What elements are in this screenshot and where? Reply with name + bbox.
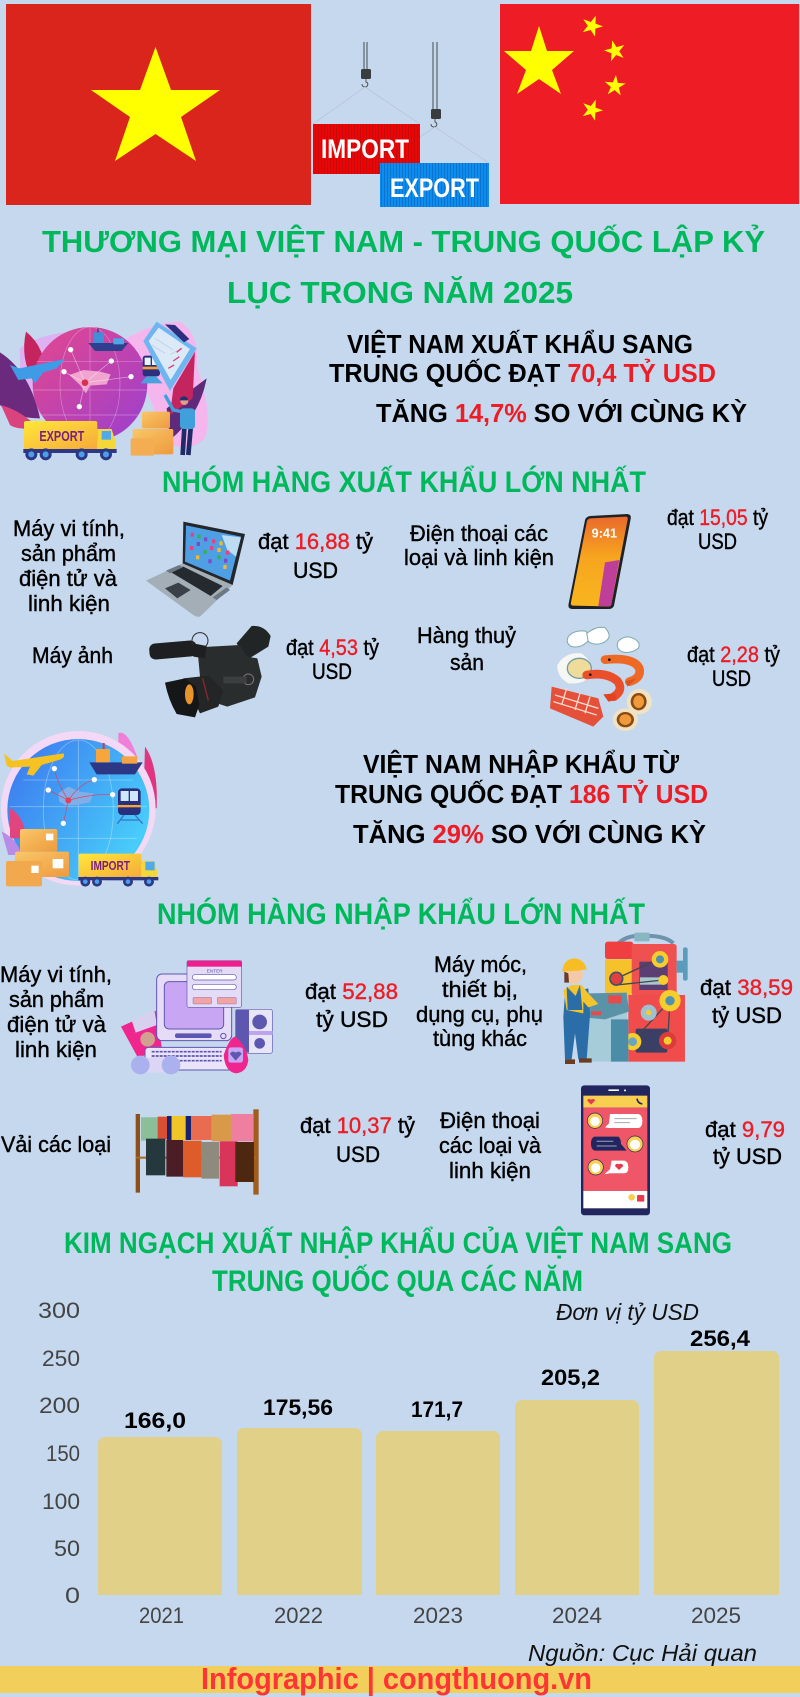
icon: smartphone (568, 514, 631, 609)
import item: fabrics (1, 1113, 416, 1167)
icon: retro computer (121, 961, 272, 1074)
icon: crane with import and export containers: IMPORT (321, 134, 409, 164)
flag: China (500, 4, 799, 204)
icon: chat smartphone (581, 1085, 650, 1215)
export item: seafood: Hàng thuỷ (417, 623, 517, 648)
chart x axis: 2024 (552, 1603, 602, 1628)
icon: laptop (146, 522, 245, 617)
chart bars (98, 1351, 779, 1595)
chart bar values (124, 1326, 751, 1433)
export item: computers: USD (293, 558, 338, 583)
heading: chart: TRUNG QUỐC QUA CÁC NĂM (212, 1264, 583, 1298)
export item: computers: đạt 16,88 tỷ (258, 529, 374, 554)
export item: phones (404, 505, 769, 570)
export item: computers: linh kiện (28, 591, 110, 616)
import summary text: TRUNG QUỐC ĐẠT 186 TỶ USD (335, 779, 708, 809)
import item: computers: điện tử và (7, 1012, 106, 1037)
import item: computers (0, 962, 398, 1062)
import item: machinery: tỷ USD (712, 1003, 782, 1028)
heading: chart (64, 1226, 732, 1298)
chart bar values: 205,2 (541, 1365, 600, 1390)
icon: fabric rack (136, 1109, 259, 1195)
icon: import globe illustration (1, 731, 158, 887)
icon: retro computer: ENTER (207, 969, 223, 974)
export summary text (329, 329, 747, 428)
export summary text: VIỆT NAM XUẤT KHẨU SANG (347, 329, 693, 359)
chart y axis: 100 (42, 1489, 80, 1514)
import item: machinery: đạt 38,59 (700, 975, 793, 1000)
chart x axis: 2023 (413, 1603, 463, 1628)
import item: computers: sản phẩm (9, 987, 104, 1012)
icon: crane with import and export containers (313, 42, 489, 207)
title: LỤC TRONG NĂM 2025 (227, 275, 573, 310)
footer band (0, 1661, 800, 1696)
chart y axis (38, 1298, 80, 1608)
import item: phones: linh kiện (449, 1158, 531, 1183)
import item: phones: đạt 9,79 (705, 1117, 785, 1142)
export item: computers: điện tử và (19, 566, 117, 591)
chart x axis: 2022 (274, 1603, 323, 1628)
icon: video camera (149, 626, 271, 717)
chart y axis: 250 (42, 1346, 80, 1371)
import item: computers: tỷ USD (316, 1007, 388, 1032)
title: THƯƠNG MẠI VIỆT NAM - TRUNG QUỐC LẬP KỶ (42, 223, 765, 259)
chart x axis (139, 1603, 741, 1628)
chart y axis: 0 (65, 1583, 80, 1608)
import item: machinery: Máy móc, (434, 952, 527, 977)
source note: Nguồn: Cục Hải quan (528, 1640, 757, 1666)
export item: phones: Điện thoại các (410, 521, 548, 546)
export summary text: TĂNG 14,7% SO VỚI CÙNG KỲ (376, 398, 747, 428)
chart bar values: 166,0 (124, 1408, 186, 1433)
export item: cameras: USD (312, 659, 352, 684)
chart bar values: 171,7 (411, 1397, 463, 1422)
icon: smartphone: 9:41 (592, 526, 618, 541)
export summary text: TRUNG QUỐC ĐẠT 70,4 TỶ USD (329, 358, 716, 388)
icon: export globe illustration (0, 322, 208, 460)
export item: computers: sản phẩm (21, 541, 116, 566)
export item: computers: Máy vi tính, (13, 516, 125, 541)
footer band: Infographic | congthuong.vn (201, 1661, 592, 1696)
import item: phones: tỷ USD (713, 1144, 782, 1169)
flag: Vietnam (6, 4, 311, 205)
import item: machinery: thiết bị, (442, 977, 518, 1002)
chart y axis: 50 (54, 1536, 80, 1561)
heading: export groups: NHÓM HÀNG XUẤT KHẨU LỚN NHẤT (162, 465, 646, 499)
import item: computers: Máy vi tính, (0, 962, 112, 987)
chart y axis: 200 (39, 1393, 80, 1418)
import item: machinery: tùng khác (433, 1026, 527, 1051)
export item: seafood: sản (450, 650, 484, 675)
chart: trade turnover by year (38, 1298, 779, 1628)
export item: phones: loại và linh kiện (404, 545, 554, 570)
title (42, 223, 765, 310)
chart unit note: Đơn vị tỷ USD (556, 1299, 699, 1325)
chart y axis: 300 (38, 1298, 80, 1323)
export item: cameras (32, 635, 380, 684)
import item: phones: các loại và (439, 1133, 541, 1158)
import item: machinery: dụng cụ, phụ (416, 1002, 543, 1027)
export item: cameras: đạt 4,53 tỷ (286, 635, 380, 660)
export item: seafood: USD (712, 666, 751, 691)
import item: fabrics: Vải các loại (1, 1132, 111, 1157)
chart x axis: 2021 (139, 1603, 184, 1628)
chart bar values: 256,4 (690, 1326, 751, 1351)
import summary text (335, 749, 708, 849)
import item: phones (439, 1108, 785, 1183)
icon: worker at machine (562, 933, 688, 1064)
icon: export globe illustration: EXPORT (39, 429, 84, 445)
import summary text: TĂNG 29% SO VỚI CÙNG KỲ (353, 819, 706, 849)
heading: import groups: NHÓM HÀNG NHẬP KHẨU LỚN NHẤT (157, 897, 645, 931)
import item: phones: Điện thoại (440, 1108, 540, 1133)
import item: fabrics: đạt 10,37 tỷ (300, 1113, 416, 1138)
chart bar values: 175,56 (263, 1395, 333, 1420)
chart y axis: 150 (46, 1441, 80, 1466)
chart x axis: 2025 (691, 1603, 741, 1628)
export item: seafood (417, 623, 781, 691)
export item: phones: USD (698, 529, 737, 554)
icon: crane with import and export containers: EXPORT (390, 173, 479, 203)
icon: import globe illustration: IMPORT (91, 859, 130, 873)
import summary text: VIỆT NAM NHẬP KHẨU TỪ (363, 749, 680, 779)
export item: phones: đạt 15,05 tỷ (667, 505, 769, 530)
export item: computers (13, 516, 374, 616)
icon: seafood (550, 627, 652, 731)
import item: computers: đạt 52,88 (305, 979, 398, 1004)
export item: seafood: đạt 2,28 tỷ (687, 642, 781, 667)
import item: computers: linh kiện (15, 1037, 97, 1062)
import item: machinery (416, 952, 793, 1051)
export item: cameras: Máy ảnh (32, 643, 113, 668)
import item: fabrics: USD (336, 1142, 380, 1167)
